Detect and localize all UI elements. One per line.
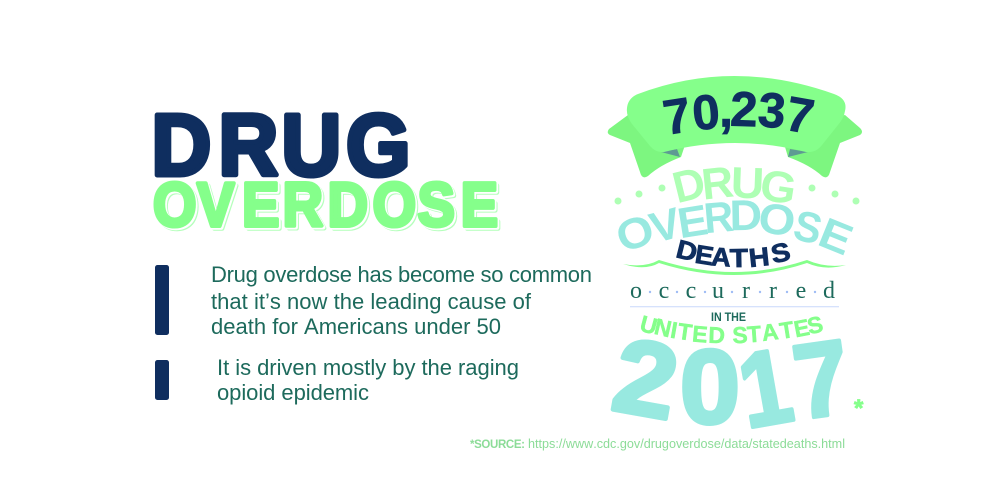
lettering: DEATHS: S [768,236,793,269]
word: occurred: c [659,278,669,304]
text block: leading cause: that it’s now the leading cause of [211,289,532,314]
lettering: DRUG: R [699,158,736,210]
word: occurred: c [686,278,696,304]
lettering: UNITED STATES [637,310,825,348]
lettering: UNITED STATES: T [746,321,762,347]
lettering: OVERDOSE: O [609,204,661,262]
lettering: DEATHS [673,234,793,273]
lettering: UNITED STATES: T [778,316,796,344]
word: occurred: o [630,278,642,304]
lettering: OVERDOSE: D [729,192,762,240]
title: OVERDOSE: OVERDOSE [153,171,498,240]
source line: https://www.cdc.gov/drugoverdose/data/statedeaths.html [528,436,845,451]
text: IN THE: IN THE [711,310,746,324]
ribbon banner [608,76,862,177]
lettering: UNITED STATES: D [708,322,725,348]
number: 70,237: 3 [756,83,788,139]
asterisk: * [854,395,864,422]
text block: opioid epidemic: opioid epidemic [217,380,369,405]
text block: opioid epidemic [217,355,519,405]
bullet bar 2 [155,360,169,400]
lettering: DEATHS: D [673,234,701,267]
source line: *SOURCE: [470,439,525,451]
text block: opioid epidemic: It is driven mostly by the raging [217,355,519,380]
year: 2017: 7 [787,318,857,442]
bullet bar 1 [155,265,169,335]
lettering: DEATHS: A [710,242,732,273]
word: occurred: e [796,278,806,304]
number: 70,237: , [719,84,733,138]
lettering: DRUG: U [730,157,765,208]
lettering: DEATHS: E [693,239,716,271]
lettering: OVERDOSE: V [645,199,687,253]
lettering: UNITED STATES: E [792,314,812,342]
word: occurred [630,278,835,304]
thin divider [630,306,839,308]
lettering: OVERDOSE: E [812,208,860,265]
text block: leading cause [211,262,592,339]
text block: leading cause: death for Americans under 50 [211,314,501,339]
lettering: UNITED STATES: S [805,311,825,339]
word: occurred: u [712,278,724,304]
lettering: UNITED STATES: A [760,318,780,346]
lettering: DRUG: G [757,159,800,214]
text block: leading cause: Drug overdose has become so common [211,262,592,287]
lettering: OVERDOSE [609,192,860,265]
number: 70,237: 7 [660,88,695,146]
title: DRUG: DRUG [152,96,410,193]
number: 70,237: 0 [690,85,722,141]
lettering: UNITED STATES: E [691,320,709,348]
lettering: OVERDOSE: E [674,196,711,248]
word: occurred: r [769,278,777,304]
lettering: UNITED STATES: U [637,310,660,340]
word: occurred: r [742,278,750,304]
title: OVERDOSE: OVERDOSE [156,174,501,242]
lettering: UNITED STATES: N [652,313,674,342]
year: 2017 [605,316,857,451]
lettering: UNITED STATES: I [669,317,679,343]
title: OVERDOSE: OVERDOSE [155,173,500,241]
year: 2017: 1 [731,327,800,451]
lettering: UNITED STATES: S [732,322,748,348]
number: 70,237: 7 [782,87,818,145]
word: occurred: d [823,278,835,304]
lettering: UNITED STATES: T [676,318,694,346]
lettering: DRUG [668,157,800,214]
year: 2017: 2 [605,316,686,442]
decorative dots [614,184,860,204]
lettering: OVERDOSE: S [789,201,827,254]
lettering: OVERDOSE: R [702,192,735,242]
lettering: DRUG: D [668,158,710,213]
number: 70,237 [660,83,818,146]
lettering: DEATHS: H [747,241,771,273]
lettering: DEATHS: T [729,244,748,273]
number: 70,237: 2 [729,83,759,137]
year: 2017: 0 [680,329,740,446]
lettering: OVERDOSE: O [755,193,799,246]
swoosh [623,260,846,275]
